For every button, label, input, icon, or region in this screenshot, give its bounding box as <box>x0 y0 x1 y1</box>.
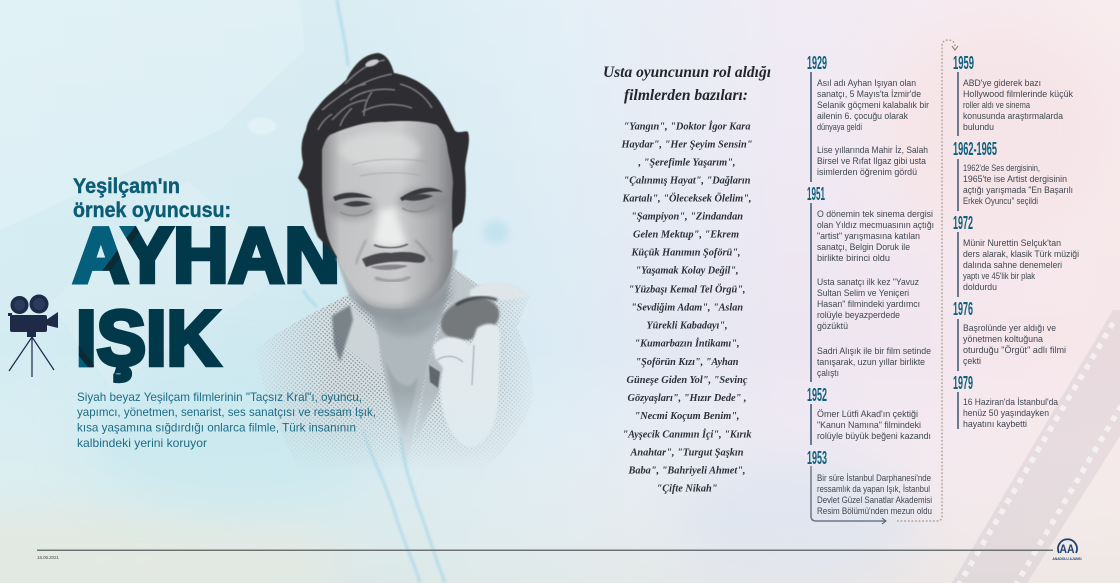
name: AYHAN: AYHAN <box>73 211 340 299</box>
logo: Anadolu Ajansı: AA <box>1060 542 1075 556</box>
right collar <box>444 270 476 313</box>
film titles: Gelen Mektup", "Ekrem <box>633 228 739 240</box>
timeline entry 1951: O dönemin tek sinema dergisi <box>817 208 933 219</box>
logo: Anadolu Ajansı: ANADOLU AJANSI <box>1052 557 1082 561</box>
timeline entry 1976 <box>953 298 1066 371</box>
facial features <box>328 132 452 322</box>
timeline entry 1959: Hollywood filmlerinde küçük <box>963 88 1073 99</box>
film titles: "Sevdiğim Adam", "Aslan <box>631 302 743 314</box>
film titles: Yürekli Kabadayı", <box>646 320 728 332</box>
film titles: "Yaşamak Kolay Değil", <box>636 264 738 276</box>
timeline entry 1959: bulundu <box>963 121 994 132</box>
timeline entry 1953 <box>807 447 932 516</box>
timeline entry 1953: Devlet Güzel Sanatlar Akademisi <box>817 494 932 505</box>
timeline entry 1951: rolüyle beyazperdede <box>817 309 900 320</box>
timeline entry 1959: 1959 <box>953 52 974 73</box>
timeline entry 1976: oturduğu "Örgüt" adlı filmi <box>963 344 1066 355</box>
panel: film list <box>603 64 771 494</box>
timeline entry 1929: ailenin 6. çocuğu olarak <box>817 110 908 121</box>
timeline entry 1962-1965: Erkek Oyuncu" seçildi <box>963 195 1038 206</box>
film titles: Güneşe Giden Yol", "Sevinç <box>626 374 748 386</box>
timeline entry 1929: Asıl adı Ayhan Işıyan olan <box>817 77 916 88</box>
timeline entry 1972: dalında sahne denemeleri <box>963 259 1062 270</box>
film list heading <box>603 64 771 104</box>
timeline entry 1979 <box>953 372 1059 429</box>
timeline entry 1929: 1929 <box>807 52 827 73</box>
name: IŞIK: IŞIK <box>76 294 220 382</box>
neck and chest <box>336 250 458 470</box>
timeline entry 1979: 16 Haziran'da İstanbul'da <box>963 396 1059 407</box>
film list heading: Usta oyuncunun rol aldığı <box>603 64 771 81</box>
timeline entry 1952: Ömer Lütfi Akad'ın çektiği <box>817 408 918 419</box>
timeline entry 1972: 1972 <box>953 212 973 233</box>
film titles: , "Şerefimle Yaşarım", <box>638 156 736 168</box>
timeline entry 1951: sanatçı, Belgin Doruk ile <box>817 241 910 252</box>
timeline entry 1951: "artist" yarışmasına katılan <box>817 230 920 241</box>
timeline entry 1953: 1953 <box>807 447 827 468</box>
timeline entry 1959: ABD'ye giderek bazı <box>963 77 1041 88</box>
film titles: "Şoförün Kızı", "Ayhan <box>636 356 738 368</box>
intro paragraph: Siyah beyaz Yeşilçam filmlerinin "Taçsız Kral"ı, oyuncu, <box>77 390 362 404</box>
timeline entry 1972 <box>953 212 1079 297</box>
timeline entry 1951: 1951 <box>807 183 825 204</box>
timeline entry 1929: Lise yıllarında Mahir İz, Salah <box>817 144 928 155</box>
film titles: Anahtar", "Turgut Şaşkın <box>630 446 744 458</box>
film titles: "Yüzbaşı Kemal Tel Örgü", <box>628 282 746 296</box>
draped jacket <box>470 282 530 300</box>
name: AYHAN: AYHAN <box>73 211 340 299</box>
film titles: Kartalı", "Öleceksek Ölelim", <box>622 192 752 204</box>
film titles: "Ayşecik Canımın İçi", "Kırık <box>622 428 752 440</box>
intro paragraph: yapımcı, yönetmen, senarist, ses sanatçısı ve ressam Işık, <box>77 405 376 419</box>
film titles <box>621 120 752 494</box>
timeline entry 1976: Başrolünde yer aldığı ve <box>963 322 1056 333</box>
timeline entry 1959: konusunda araştırmalarda <box>963 110 1064 121</box>
film strip decoration <box>951 310 1120 583</box>
main title block <box>73 175 340 382</box>
timeline entry 1972: Münir Nurettin Selçuk'tan <box>963 237 1061 248</box>
timeline entry 1951: birlikte birinci oldu <box>817 252 890 263</box>
timeline entry 1951: Hasan" filmindeki yardımcı <box>817 298 920 309</box>
film titles: "Şampiyon", "Zindandan <box>631 210 743 222</box>
name: AYHAN: AYHAN <box>73 211 340 299</box>
icon: film camera on tripod <box>8 294 58 377</box>
timeline entry 1952: 1952 <box>807 384 827 405</box>
timeline entry 1962-1965 <box>953 138 1073 211</box>
name: AYHAN <box>72 226 338 284</box>
timeline entry 1979: hayatını kaybetti <box>963 418 1027 429</box>
timeline entry 1929: Birsel ve Rıfat Ilgaz gibi usta <box>817 155 927 166</box>
timeline entry 1972: yaptı ve 45'lik bir plak <box>963 270 1035 281</box>
film titles: Baba", "Bahriyeli Ahmet", <box>628 464 746 476</box>
intro paragraph: kısa yaşamına sığdırdığı onlarca filmle, Türk insanının <box>77 420 356 434</box>
forehead and cheek shading <box>328 194 376 220</box>
timeline entry 1929: Selanik göçmeni kalabalık bir <box>817 99 929 110</box>
hair <box>298 53 469 260</box>
timeline entry 1929: isimlerden öğrenim gördü <box>817 166 917 177</box>
timeline left column <box>807 52 934 516</box>
portrait of Ayhan Işık <box>255 53 533 472</box>
timeline entry 1951: gözüktü <box>817 320 848 331</box>
timeline entry 1962-1965: 1965'te ise Artist dergisinin <box>963 173 1067 184</box>
timeline entry 1951: Usta sanatçı ilk kez "Yavuz <box>817 276 919 287</box>
timeline entry 1976: çekti <box>963 355 981 366</box>
film list heading: filmlerden bazıları: <box>624 87 748 104</box>
timeline entry 1953: ressamlık da yapan Işık, İstanbul <box>817 483 930 494</box>
film titles: Gözyaşları", "Hızır Dede" , <box>628 392 746 404</box>
film titles: "Çalınmış Hayat", "Dağların <box>624 174 750 186</box>
timeline right column <box>953 52 1079 429</box>
timeline entry 1962-1965: 1962'de Ses dergisinin, <box>963 162 1040 173</box>
timeline entry 1929: dünyaya geldi <box>817 121 862 132</box>
timeline entry 1951 <box>807 183 934 382</box>
subtitle: örnek oyuncusu: <box>73 199 231 222</box>
timeline entry 1952: rolüyle büyük beğeni kazandı <box>817 430 931 441</box>
timeline entry 1976: yönetmen koltuğuna <box>963 333 1044 344</box>
film titles: Küçük Hanımın Şoförü", <box>631 246 740 258</box>
film titles: "Kumarbazın İntikamı", <box>634 338 740 350</box>
timeline connectors <box>811 40 958 524</box>
face <box>322 121 453 309</box>
hair strands <box>318 60 432 130</box>
intro paragraph <box>77 390 376 450</box>
timeline entry 1979: henüz 50 yaşındayken <box>963 407 1049 418</box>
timeline entry 1959: roller aldı ve sinema <box>963 99 1031 110</box>
subtitle <box>73 175 231 222</box>
film titles: "Çifte Nikah" <box>656 482 718 494</box>
hand <box>433 324 500 448</box>
film titles: Haydar", "Her Şeyim Sensin" <box>621 138 752 150</box>
timeline entry 1951: olan Yıldız mecmuasının açtığı <box>817 219 934 230</box>
name: IŞIK: IŞIK <box>76 294 220 382</box>
timeline entry 1951: çalıştı <box>817 367 839 378</box>
film titles: "Necmi Koçum Benim", <box>634 410 740 422</box>
shirt and shoulders <box>255 250 533 472</box>
subtitle: Yeşilçam'ın <box>73 175 180 198</box>
timeline entry 1951: tanışarak, uzun yıllar birlikte <box>817 356 925 367</box>
timeline entry 1952 <box>807 384 931 445</box>
timeline entry 1929 <box>807 52 929 182</box>
timeline entry 1976: 1976 <box>953 298 973 319</box>
timeline entry 1959 <box>953 52 1073 136</box>
timeline entry 1929: sanatçı, 5 Mayıs'ta İzmir'de <box>817 88 921 99</box>
timeline entry 1979: 1979 <box>953 372 973 393</box>
timeline entry 1962-1965: açtığı yarışmada "En Başarılı <box>963 184 1073 195</box>
timeline entry 1962-1965: 1962-1965 <box>953 138 997 159</box>
timeline entry 1952: "Kanun Namına" filmindeki <box>817 419 921 430</box>
timeline entry 1972: ders alarak, klasik Türk müziği <box>963 248 1079 259</box>
film titles: "Yangın", "Doktor İgor Kara <box>624 120 751 132</box>
timeline entry 1972: doldurdu <box>963 281 997 292</box>
left collar <box>332 305 381 375</box>
timeline entry 1953: Bir süre İstanbul Darphanesi'nde <box>817 472 931 483</box>
timeline entry 1951: Sultan Selim ve Yeniçeri <box>817 287 909 298</box>
name: IŞIK: IŞIK <box>76 294 220 382</box>
timeline entry 1953: Resim Bölümü'nden mezun oldu <box>817 505 932 516</box>
logo: Anadolu Ajansı <box>1052 539 1082 561</box>
timeline entry 1951: Sadri Alışık ile bir film setinde <box>817 345 931 356</box>
intro paragraph: kalbindeki yerini koruyor <box>77 436 207 450</box>
footer rule and date: 16.06.2021 <box>37 555 59 561</box>
